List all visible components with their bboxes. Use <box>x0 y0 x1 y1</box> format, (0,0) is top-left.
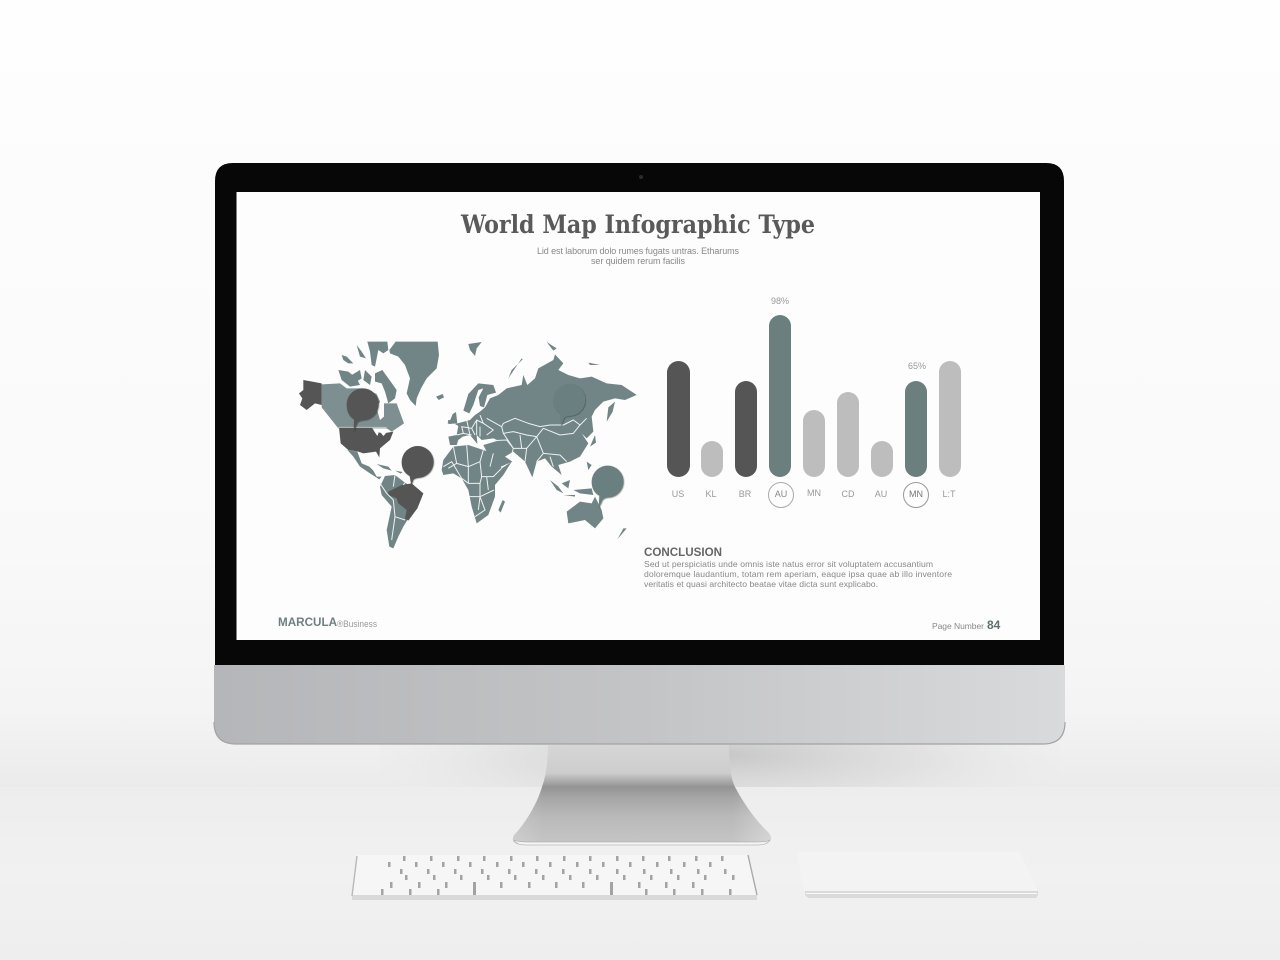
pin: Brazil <box>402 446 434 485</box>
bar: AU <box>769 315 791 477</box>
Brazil <box>388 483 423 521</box>
value: 65%: 65% <box>908 361 926 371</box>
keyboard <box>352 855 757 900</box>
axis labels: KL <box>705 489 717 499</box>
footer page number: 84 <box>987 618 1001 632</box>
bar: BR <box>735 381 757 477</box>
conclusion body <box>644 559 952 589</box>
axis labels: CD <box>842 489 855 499</box>
footer page number: Page Number <box>932 621 984 631</box>
Africa <box>442 445 512 523</box>
Caribbean <box>377 464 403 474</box>
bar: CD <box>837 392 859 477</box>
Madagascar <box>498 500 505 513</box>
world map <box>299 342 637 548</box>
British Isles <box>448 412 457 424</box>
bar: LT <box>939 361 961 477</box>
Scandinavia <box>463 383 496 413</box>
axis labels: BR <box>739 489 752 499</box>
footer brand: ®Business <box>337 619 377 629</box>
monitor chin <box>214 665 1065 744</box>
South America <box>380 475 423 548</box>
pin: Russia <box>553 384 585 427</box>
subtitle: Lid est laborum dolo rumes fugats untras. Etharums <box>537 246 740 256</box>
Indonesia and Philippines <box>550 462 593 497</box>
New Zealand <box>617 528 627 539</box>
USA <box>339 428 393 457</box>
title: World Map Infographic Type <box>460 210 815 239</box>
highlight circle: MN <box>904 482 928 508</box>
conclusion body: veritatis et quasi architecto beatae vitae dicta sunt explicabo. <box>644 579 878 589</box>
conclusion <box>644 545 952 589</box>
axis labels: MN <box>807 488 821 498</box>
Canadian arctic islands <box>338 342 397 403</box>
trackpad <box>797 852 1038 898</box>
map: dark highlighted countries <box>299 380 423 521</box>
pin: USA <box>347 388 379 432</box>
Australia <box>567 497 603 528</box>
conclusion body: doloremque laudantium, totam rem aperiam, eaque ipsa quae ab illo inventore <box>644 569 952 579</box>
bar chart <box>667 296 961 508</box>
bar: MN 2 <box>905 381 927 477</box>
value: 98%: 98% <box>771 296 789 306</box>
Greenland <box>389 342 439 406</box>
conclusion body: Sed ut perspiciatis unde omnis iste natus error sit voluptatem accusantium <box>644 559 933 569</box>
bar: US <box>667 361 690 477</box>
Canada <box>322 383 404 432</box>
monitor bezel <box>215 163 1064 665</box>
map: country borders <box>338 415 587 540</box>
keyboard key gaps <box>381 856 734 895</box>
bar: KL <box>701 441 723 477</box>
Iceland <box>436 394 444 400</box>
camera <box>639 175 643 179</box>
Mexico and Central America <box>347 450 382 479</box>
pin: Australia <box>592 466 624 509</box>
subtitle <box>537 246 740 266</box>
Alaska <box>299 380 322 410</box>
axis labels: MN <box>909 489 923 499</box>
map: Great Lakes gaps <box>373 430 386 436</box>
Eurasia <box>448 354 637 477</box>
footer brand <box>278 615 377 629</box>
bar: AU 2 <box>871 441 893 477</box>
axis labels <box>672 488 956 499</box>
footer brand: MARCULA <box>278 615 337 629</box>
screen <box>236 192 1040 640</box>
highlight circle: AU <box>768 482 794 508</box>
Japan and Sakhalin <box>590 402 615 447</box>
axis labels: US <box>672 489 684 499</box>
subtitle: ser quidem rerum facilis <box>591 256 686 266</box>
footer page number <box>932 618 1001 632</box>
bar: MN <box>803 410 825 477</box>
Svalbard and arctic <box>468 342 600 378</box>
axis labels: L:T <box>942 489 956 499</box>
monitor stand <box>513 745 771 845</box>
axis labels: AU <box>875 489 887 499</box>
map: teal landmasses <box>322 342 637 548</box>
conclusion heading: CONCLUSION <box>644 545 722 559</box>
monitor <box>214 163 1065 744</box>
axis labels: AU <box>775 489 787 499</box>
